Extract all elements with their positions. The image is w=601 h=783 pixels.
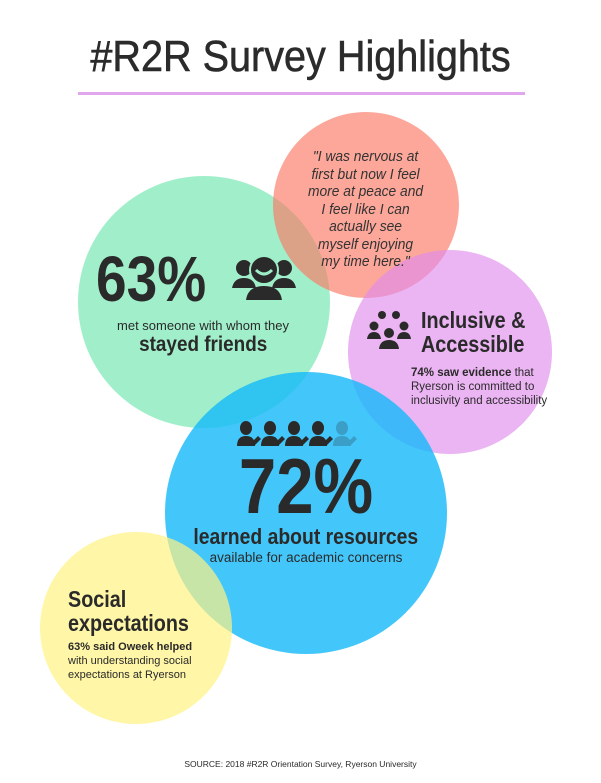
social text: expectations at Ryerson (68, 669, 186, 681)
source footer: SOURCE: 2018 #R2R Orientation Survey, Ryerson University (184, 759, 417, 769)
quote text: myself enjoying (318, 236, 414, 252)
inclusive heading (421, 307, 525, 357)
quote text: actually see (330, 218, 402, 235)
icon: five users with pencils (237, 421, 357, 446)
circle: pink inclusive (348, 250, 552, 454)
quote text: "I was nervous at (313, 148, 419, 165)
icon: people group (367, 311, 411, 349)
title underline (78, 92, 525, 95)
circle: red quote (273, 112, 459, 298)
quote text: my time here." (322, 253, 410, 270)
social heading: expectations (68, 610, 189, 636)
social text (68, 641, 192, 681)
inclusive text: Ryerson is committed to (411, 381, 534, 393)
circle: yellow social (40, 532, 232, 724)
quote text: first but now I feel (312, 166, 420, 182)
quote text (308, 148, 424, 270)
text: stayed friends (139, 333, 267, 356)
quote text: more at peace and (308, 183, 424, 200)
circle: blue resources (165, 372, 447, 654)
social heading (68, 586, 189, 636)
social text: with understanding social (68, 655, 192, 667)
circle: green friends (78, 176, 330, 428)
stat: 63%: 63% (96, 243, 206, 315)
friends caption: met someone with whom they (117, 318, 289, 333)
title: #R2R Survey Highlights (90, 32, 511, 81)
inclusive heading: Inclusive & (421, 307, 525, 333)
quote text: I feel like I can (322, 200, 410, 218)
text: available for academic concerns (210, 550, 402, 565)
stat: 72%: 72% (239, 442, 373, 530)
inclusive heading: Accessible (421, 331, 524, 357)
icon: group (232, 257, 296, 300)
inclusive text (411, 367, 548, 407)
inclusive text: inclusivity and accessibility (411, 395, 547, 407)
resources caption: learned about resources (194, 524, 418, 549)
inclusive text: 74% saw evidence that (411, 367, 534, 379)
social heading: Social (68, 586, 126, 612)
social text: 63% said Oweek helped (68, 641, 192, 653)
